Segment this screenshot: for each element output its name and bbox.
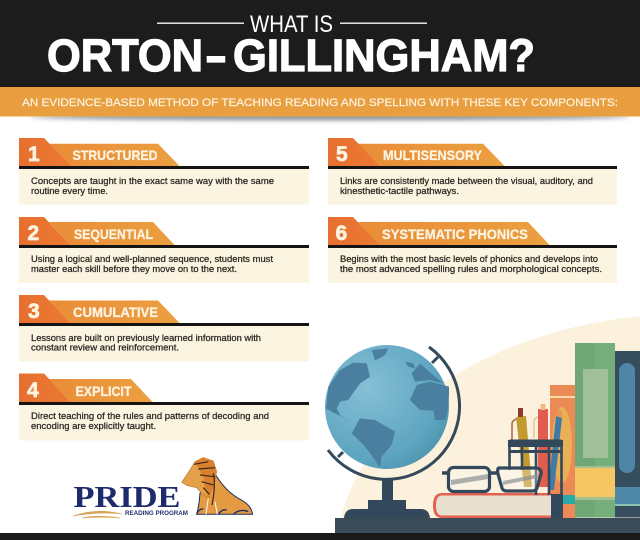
logo subtitle: READING PROGRAM [125,510,188,517]
logo swoosh [73,511,122,518]
icon: lion [182,458,253,514]
header banner [0,0,640,88]
panel: 1 structured: routine every time. [31,186,108,196]
title [47,30,535,81]
panel: 3 cumulative: CUMULATIVE [73,305,158,320]
panel: 5 multisensory: 5 [336,143,348,166]
subtitle band: AN EVIDENCE-BASED METHOD OF TEACHING READING AND SPELLING WITH THESE KEY COMPONENTS: [22,97,618,109]
icon: glasses [442,468,541,492]
panel: 1 structured: 1 [28,143,40,166]
globe stand base [344,478,430,518]
globe stand arc [328,347,460,479]
title: GILLINGHAM? [233,30,535,81]
panel: 4 explicit: 4 [27,379,39,402]
panel: 5 multisensory: Links are consistently made between the visual, auditory, and [340,176,593,186]
panel: 3 cumulative: 3 [28,300,40,323]
icon: globe [325,345,449,469]
panel: 1 structured: Concepts are taught in the exact same way with the same [31,176,274,186]
logo: pride reading program [73,458,253,518]
panel: 6 systematic phonics: Begins with the most basic levels of phonics and develops into [340,254,598,264]
panel: 4 explicit: encoding are explicitly taught. [31,421,156,431]
panel: 5 multisensory: kinesthetic-tactile pathways. [340,186,459,196]
illustration: globe on stand [325,345,460,518]
title: - [205,30,227,81]
panel: 6 systematic phonics: 6 [336,222,347,245]
globe land masses [326,348,449,467]
panel: 6 systematic phonics [328,217,617,283]
panel: 1 structured: STRUCTURED [72,148,158,163]
panel: 4 explicit: EXPLICIT [76,384,132,399]
subtitle band [0,87,640,120]
logo wordmark: PRIDE [74,479,180,514]
bottom bar [0,533,640,540]
icon: green book [575,343,615,518]
icon: red book [433,493,552,518]
panel: 4 explicit [19,374,309,440]
panel: 4 explicit: Direct teaching of the rules and patterns of decoding and [31,411,269,421]
panel: 6 systematic phonics: SYSTEMATIC PHONICS [382,227,528,242]
panel: 2 sequential: master each skill before they move on to the next. [31,264,237,274]
panel: 2 sequential [19,217,309,283]
panel: 2 sequential: SEQUENTIAL [74,227,153,242]
panel: 1 structured [19,138,309,204]
heading: what is: WHAT IS [250,11,333,38]
icon: pencil cup [508,404,563,518]
panel: 3 cumulative [19,295,309,362]
illustration: books [433,343,640,518]
icon: navy book [615,351,640,518]
panel: 3 cumulative: constant review and reinforcement. [31,342,179,352]
panel: 2 sequential: Using a logical and well-planned sequence, students must [31,254,274,264]
panel: 2 sequential: 2 [28,222,39,245]
icon: orange book [550,385,576,518]
title: ORTON [47,30,203,81]
panel: 3 cumulative: Lessons are built on previously learned information with [31,333,261,343]
panel: 6 systematic phonics: the most advanced spelling rules and morphological concepts. [340,264,602,274]
panel: 5 multisensory: MULTISENSORY [383,148,482,163]
shelf [335,518,640,533]
illustration backdrop: cream hill [338,316,640,533]
panel: 5 multisensory [328,138,617,204]
